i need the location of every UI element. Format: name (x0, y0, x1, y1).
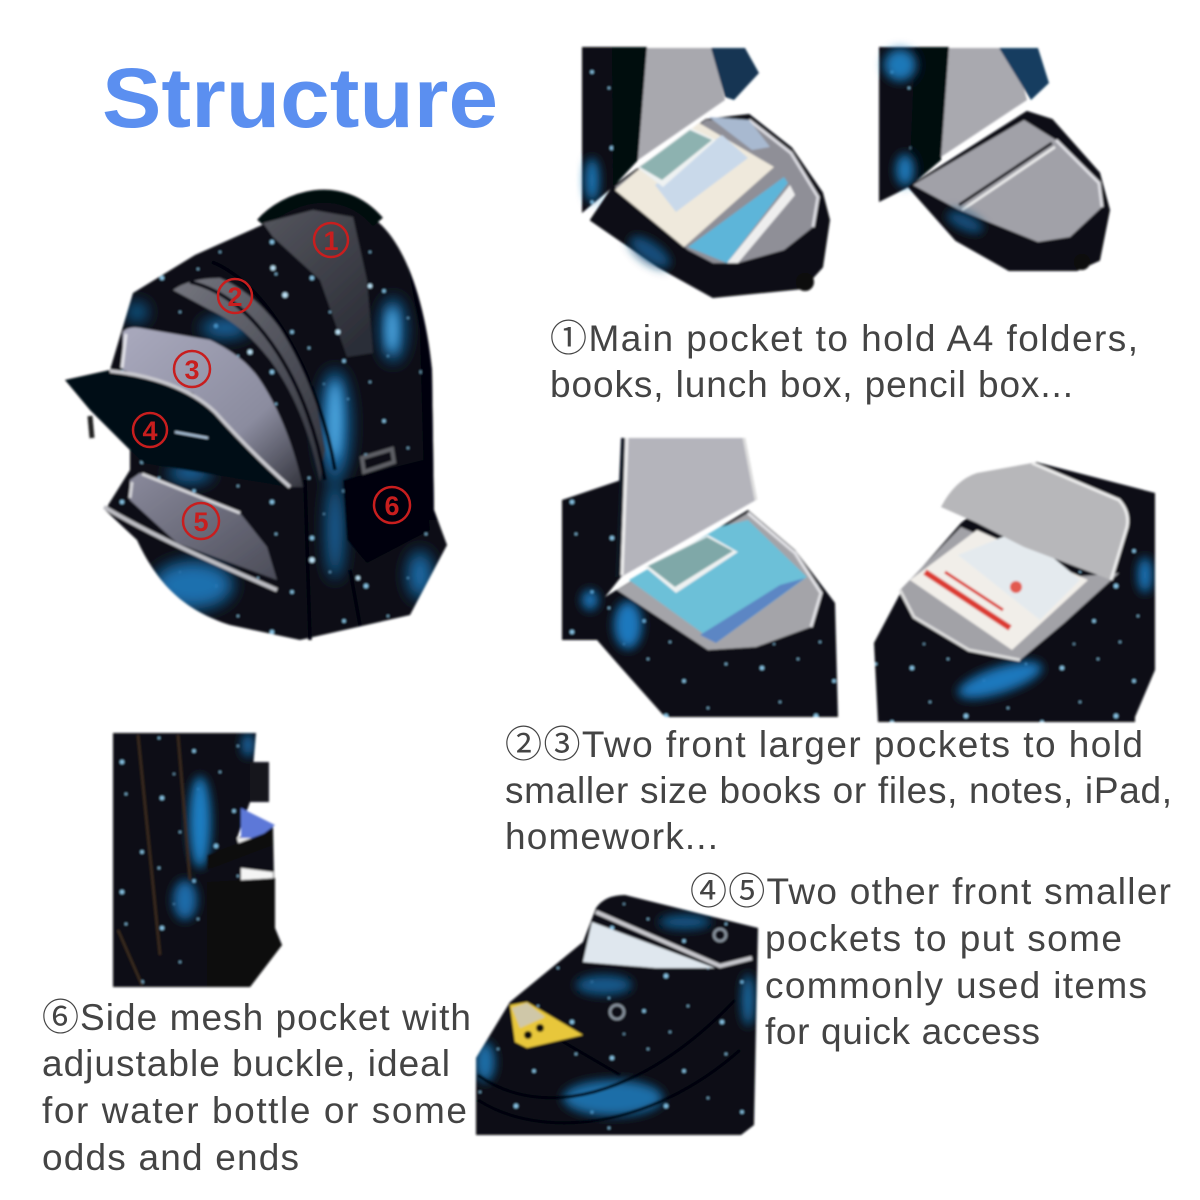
marker 1 (314, 223, 348, 257)
lower flap edge (104, 507, 277, 590)
small pockets caption: pockets to put some (765, 918, 1122, 959)
marker 5: 5 (193, 507, 209, 537)
front pockets caption: smaller size books or files, notes, iPad, (505, 770, 1172, 811)
front pockets caption: homework... (505, 816, 718, 857)
small pockets caption: ④⑤Two other front smaller (690, 871, 1171, 912)
small pockets caption: for quick access (765, 1011, 1040, 1052)
marker 4 (133, 413, 167, 447)
side pocket caption: for water bottle or some (42, 1090, 467, 1131)
side mesh pocket (343, 460, 430, 563)
side pocket caption: odds and ends (42, 1137, 299, 1178)
marker 3 (174, 351, 210, 387)
photo: main pocket empty (879, 47, 1109, 270)
photo: pocket with red-title book (870, 460, 1160, 725)
pocket 5 lining (130, 473, 277, 580)
marker 3: 3 (184, 355, 200, 385)
front pockets caption: ②③Two front larger pockets to hold (505, 724, 1143, 765)
pocket 2 lining (173, 278, 325, 482)
marker 5 (183, 503, 219, 539)
marker 4: 4 (142, 416, 158, 446)
photo: pocket with tablet and blue book (555, 438, 845, 720)
marker 6: 6 (384, 491, 400, 521)
side pocket caption (42, 997, 471, 1178)
marker 2 (218, 279, 252, 313)
zipper pull (90, 416, 92, 438)
photo: small front pockets with patch (470, 890, 760, 1140)
side pocket caption: adjustable buckle, ideal (42, 1043, 450, 1084)
photo: main pocket with books (582, 47, 829, 297)
main pocket caption (550, 318, 1138, 405)
pocket 1 lining (263, 210, 373, 357)
number markers on backpack (133, 223, 410, 539)
small pockets caption: commonly used items (765, 965, 1147, 1006)
side pocket caption: ⑥Side mesh pocket with (42, 997, 471, 1038)
photo: side mesh pocket (110, 730, 285, 990)
small pockets caption (690, 871, 1171, 1052)
marker 2: 2 (227, 282, 243, 312)
top handle (262, 196, 378, 224)
main pocket caption: ①Main pocket to hold A4 folders, (550, 318, 1138, 359)
marker 6 (374, 487, 410, 523)
pocket 4 flap (65, 370, 290, 487)
main pocket caption: books, lunch box, pencil box... (550, 364, 1073, 405)
pocket 3 lining (123, 328, 303, 487)
buckle (362, 449, 394, 472)
main backpack with numbered pockets (60, 180, 460, 650)
marker 1: 1 (323, 226, 339, 256)
title: Structure (102, 51, 498, 145)
front pockets caption (505, 724, 1172, 857)
seams (190, 262, 360, 640)
bright stars (248, 266, 372, 580)
